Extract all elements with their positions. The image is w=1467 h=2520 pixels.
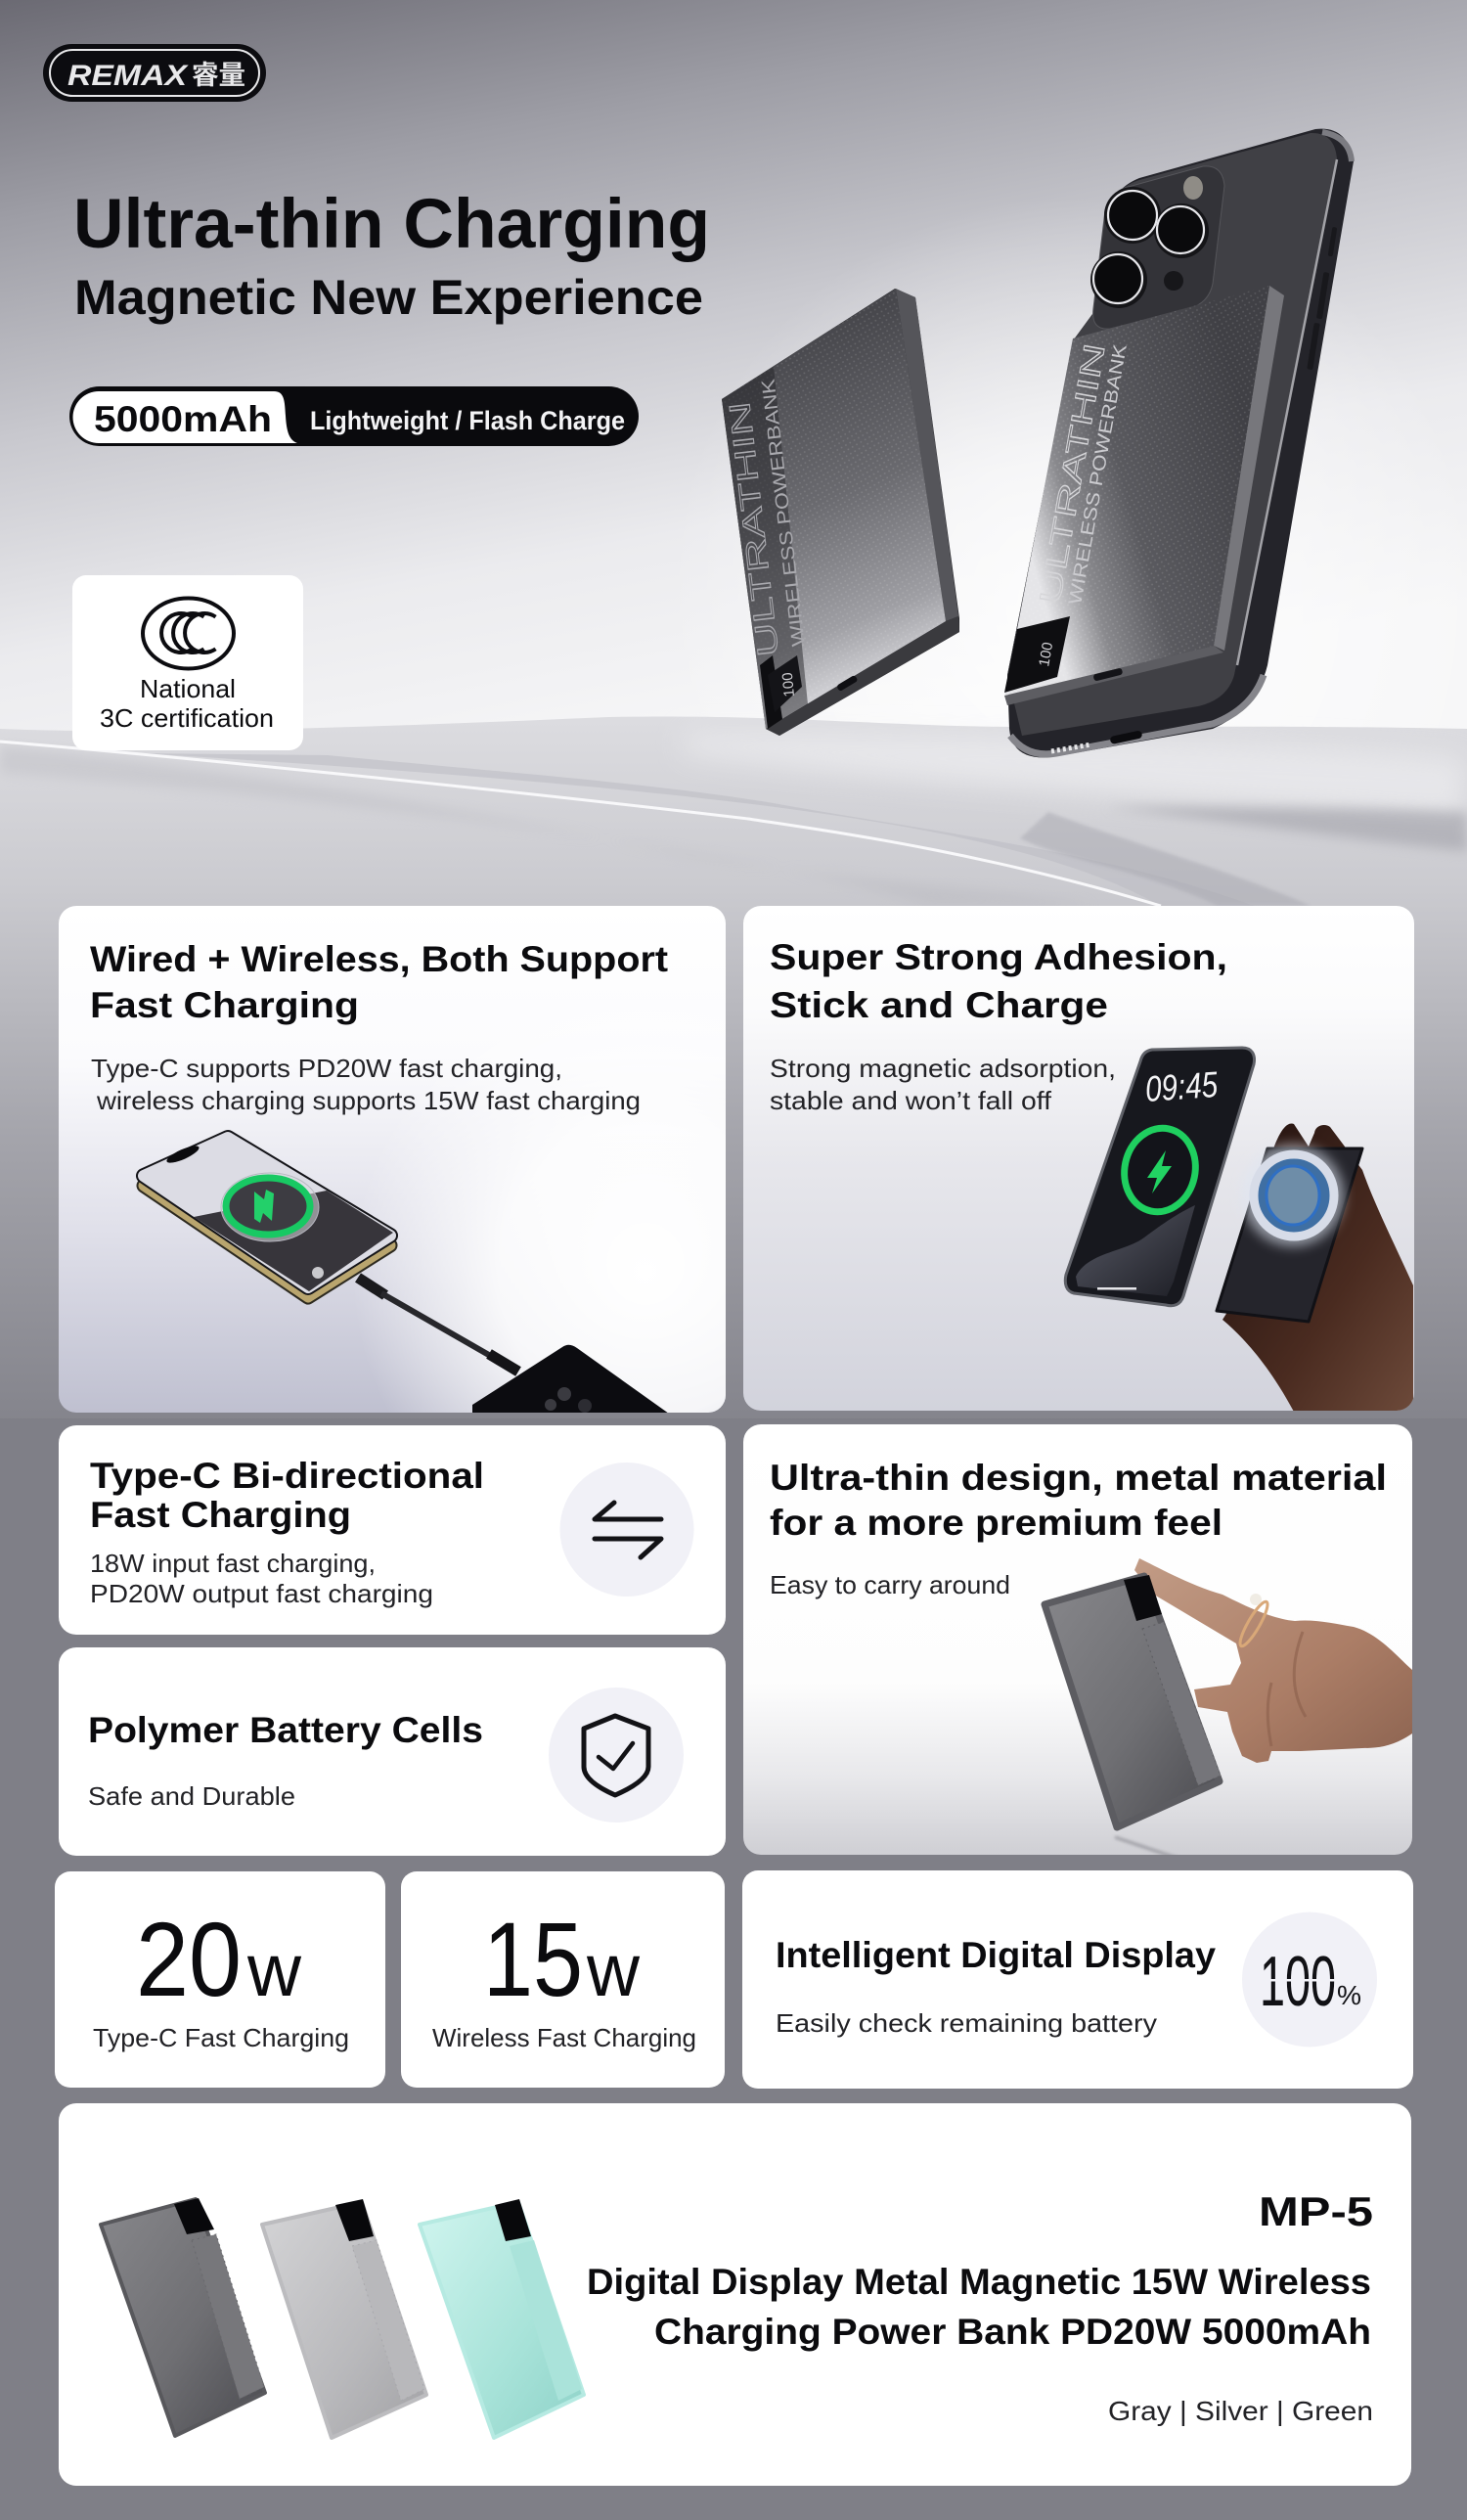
heading <box>770 937 1227 1025</box>
product: left power bank: WIRELESS POWERBANK <box>758 378 810 648</box>
product title: Digital Display Metal Magnetic 15W Wireless <box>587 2262 1371 2302</box>
heading <box>770 1458 1387 1543</box>
buttons <box>1328 227 1337 256</box>
body text <box>90 1549 433 1608</box>
icon: shield check <box>549 1688 684 1822</box>
product: phone with magnetic bank: ULTRATHIN <box>1034 341 1112 607</box>
image: black bank at card bottom <box>472 1344 667 1413</box>
heading: Type-C Bi-directional <box>90 1456 484 1496</box>
stat card: 20W: Type-C Fast Charging <box>93 2023 349 2052</box>
stat card: 20W: w <box>246 1929 302 2012</box>
product title <box>587 2262 1371 2352</box>
title: Magnetic New Experience <box>74 270 703 325</box>
heading: Ultra-thin design, metal material <box>770 1458 1387 1498</box>
icon: 100% readout: % <box>1337 1980 1361 2010</box>
heading: Polymer Battery Cells <box>88 1710 483 1750</box>
heading: Intelligent Digital Display <box>776 1935 1216 1975</box>
image: finger touching bank <box>1045 1558 1412 1864</box>
heading: for a more premium feel <box>770 1503 1222 1543</box>
title: Ultra-thin Charging <box>73 186 710 263</box>
heading: Wired + Wireless, Both Support <box>90 939 668 979</box>
image: gray bank <box>101 2198 265 2436</box>
bank on phone <box>1214 286 1284 651</box>
product lettering: ULTRATHIN <box>724 400 785 658</box>
stat card: 20W: 20 <box>136 1900 242 2018</box>
heading: Super Strong Adhesion, <box>770 937 1227 977</box>
logo: REMAX <box>43 44 266 102</box>
badge: 5000mAh pill: 5000mAh <box>94 399 272 439</box>
panel: polymer battery cells <box>59 1647 726 1856</box>
badge: 3C certification <box>72 575 303 750</box>
body text: Strong magnetic adsorption, <box>770 1054 1116 1083</box>
panel: super strong adhesion <box>743 906 1414 1414</box>
body text: wireless charging supports 15W fast charging <box>96 1086 641 1115</box>
heading <box>90 1456 484 1535</box>
product: phone with magnetic bank: WIRELESS POWERBANK <box>1065 342 1132 607</box>
panel: ultra-thin design <box>743 1424 1412 1864</box>
body text: Safe and Durable <box>88 1781 295 1811</box>
image: green bank <box>420 2199 584 2438</box>
logo: REMAX: 睿量 <box>192 61 245 90</box>
panel: MP-5 product summary <box>59 2103 1411 2486</box>
icon: CCC mark <box>143 599 234 669</box>
badge: 3C certification: 3C certification <box>100 703 274 733</box>
body text <box>91 1054 641 1115</box>
body text: PD20W output fast charging <box>90 1579 433 1608</box>
model number: MP-5 <box>1259 2188 1373 2234</box>
product: left power bank: 100 <box>779 672 798 698</box>
image: phone charging by cable <box>144 1138 518 1372</box>
image: silver bank <box>262 2199 426 2438</box>
body text: stable and won’t fall off <box>770 1086 1052 1115</box>
image: hand holding bank <box>1217 1124 1413 1414</box>
heading: Stick and Charge <box>770 985 1108 1025</box>
heading: Fast Charging <box>90 1495 351 1535</box>
panel: intelligent digital display <box>742 1870 1413 2089</box>
panel: wired + wireless <box>59 906 734 1428</box>
badge: 3C certification: National <box>140 674 236 703</box>
title <box>73 186 710 325</box>
stat card: 15W: 15 <box>483 1900 583 2018</box>
icon: 100% readout: 100 <box>1260 1943 1336 2021</box>
stat card: 15W <box>401 1871 725 2088</box>
badge: 5000mAh pill: Lightweight / Flash Charge <box>310 406 625 435</box>
camera module <box>1093 166 1224 329</box>
heading: Fast Charging <box>90 985 359 1025</box>
icon: 100% readout <box>1242 1912 1377 2047</box>
logo: REMAX: REMAX <box>67 60 189 92</box>
icon: bidirectional arrows <box>559 1462 694 1597</box>
body text: Type-C supports PD20W fast charging, <box>91 1054 562 1083</box>
colour options: Gray | Silver | Green <box>1108 2396 1373 2426</box>
stat card: 15W: Wireless Fast Charging <box>432 2023 696 2052</box>
badge: 5000mAh pill <box>69 386 639 446</box>
body text: 18W input fast charging, <box>90 1549 376 1578</box>
phone body <box>1007 129 1354 757</box>
stat card: 15W: w <box>586 1929 641 2012</box>
product title: Charging Power Bank PD20W 5000mAh <box>654 2312 1371 2352</box>
body text <box>770 1054 1116 1115</box>
product: left power bank <box>722 289 959 736</box>
heading <box>90 939 668 1025</box>
product: phone with magnetic bank <box>1004 129 1354 757</box>
panel: Type-C bi-directional <box>59 1425 726 1635</box>
body text: Easily check remaining battery <box>776 2008 1157 2038</box>
image: phone showing 09:45: 09:45 <box>1144 1064 1220 1109</box>
body text: Easy to carry around <box>770 1570 1010 1599</box>
stat card: 20W <box>55 1871 385 2088</box>
image: phone showing 09:45 <box>1065 1048 1254 1306</box>
product: phone with magnetic bank: 100 <box>1036 641 1056 668</box>
